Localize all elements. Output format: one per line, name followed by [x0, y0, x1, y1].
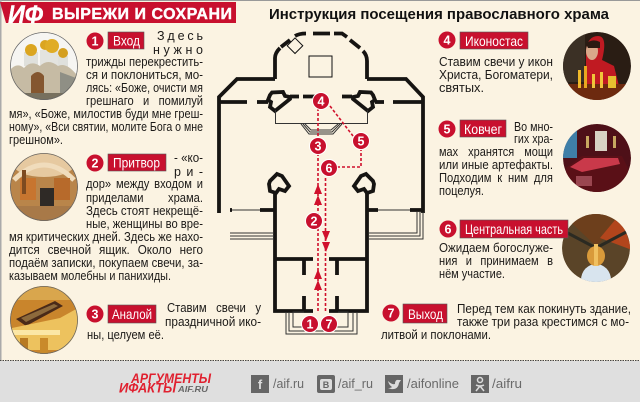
walls: [219, 34, 423, 311]
main title: Инструкция посещения православного храма: [269, 6, 610, 23]
step 4: iconostasis: Ставим свечи у икон: [439, 55, 553, 69]
arrows: [314, 184, 330, 290]
step 1: entrance: Вход: [113, 32, 140, 48]
markers: 1: [307, 318, 314, 332]
markers: 7: [326, 318, 333, 332]
step 1: entrance: нужно: [153, 43, 203, 57]
footer band: [0, 360, 640, 402]
step 3: analogion: ны, целуем её.: [87, 328, 164, 342]
step 1: entrance: ся и поклониться, мо-: [86, 68, 203, 82]
step 6: central part: ния и принимаем в: [439, 254, 553, 268]
social links: В: [323, 380, 330, 390]
step 5: ark: Во мно-: [514, 120, 553, 134]
step 5: ark: Подходим к ним для: [439, 171, 553, 185]
step 4: iconostasis: Иконостас: [465, 33, 523, 49]
banner title: ВЫРЕЖИ И СОХРАНИ: [52, 6, 232, 23]
photo: reliquary: [563, 124, 631, 192]
step 4: iconostasis: святых.: [439, 81, 484, 95]
step 6: central part: Центральная часть: [465, 221, 563, 237]
step 3: analogion: праздничной ико-: [165, 315, 261, 329]
markers: 2: [311, 214, 318, 228]
step 2: narthex: ри-: [174, 165, 203, 179]
step 6: central part: нём участие.: [439, 267, 505, 281]
step 7: exit: Выход: [408, 306, 443, 322]
step 4: iconostasis: Христа, Богоматери,: [439, 68, 553, 82]
step 1: entrance: 1: [92, 34, 99, 48]
step 5: ark: 5: [444, 122, 451, 136]
step 2: narthex: казываем молебны и панихиды.: [9, 269, 171, 283]
social links: /aif_ru: [338, 376, 373, 391]
logo: ИФ: ИФ: [8, 1, 43, 29]
header banner: [0, 1, 236, 29]
step 5: ark: или иные артефакты.: [439, 158, 553, 172]
step 3: analogion: Ставим свечи у: [167, 301, 262, 315]
footer logo: ИФАКТЫ: [119, 380, 176, 396]
step 2: narthex: Здесь стоят некрещё-: [86, 204, 203, 218]
step 5: ark: Ковчег: [464, 121, 502, 137]
step 2: narthex: подаём записки, покупаем свечи, за-: [9, 256, 203, 270]
step 2: narthex: дится свечной ящик. Около него: [9, 243, 203, 257]
step 5: ark: гих хра-: [514, 132, 553, 146]
step 6: central part: 6: [445, 222, 452, 236]
step 3: analogion: Аналой: [112, 306, 152, 322]
step 1: entrance: ному», «Вси святии, молите Бога о мне: [9, 120, 203, 134]
step 6: central part: Ожидаем богослуже-: [439, 241, 553, 255]
photo: analogion: [10, 286, 78, 354]
markers: 4: [318, 94, 325, 108]
step 1: entrance: грешнаго и помилуй: [86, 94, 203, 108]
step 1: entrance: Здесь: [157, 29, 203, 43]
step 7: exit: Перед тем как покинуть здание,: [457, 302, 631, 316]
step 2: narthex: ные, женщины во вре-: [86, 217, 203, 231]
step 1: entrance: трижды перекрестить-: [86, 55, 203, 69]
photo: woman with candles: [563, 32, 631, 100]
step 2: narthex: 2: [92, 156, 99, 170]
route: [318, 105, 361, 311]
step 2: narthex: мя критических дней. Здесь же нахо-: [9, 230, 203, 244]
step 6: central part: [439, 220, 568, 281]
step 4: iconostasis: 4: [444, 34, 451, 48]
floor plan: [219, 34, 423, 334]
footer logo: АРГУМЕНТЫ: [130, 371, 211, 386]
step 7: exit: 7: [388, 306, 395, 320]
step 4: iconostasis: [438, 32, 553, 95]
social links: /aif.ru: [273, 376, 304, 391]
markers: [302, 92, 370, 332]
social links: /aifonline: [407, 376, 459, 391]
step 7: exit: [381, 302, 631, 342]
step 7: exit: также три раза крестимся с мо-: [457, 315, 629, 329]
photo: ceiling: [562, 214, 630, 282]
markers: 5: [358, 134, 365, 148]
step 3: analogion: [86, 301, 262, 342]
footer logo: AIF.RU: [177, 385, 208, 394]
social links: [251, 375, 522, 393]
step 2: narthex: приделами храма.: [86, 191, 203, 205]
step 5: ark: мах хранятся мощи: [439, 145, 553, 159]
social links: f: [258, 377, 263, 392]
step 2: narthex: Притвор: [113, 154, 160, 170]
markers: 3: [315, 140, 322, 154]
social links: /aifru: [492, 376, 522, 391]
step 2: narthex: [9, 151, 203, 283]
step 1: entrance: лясь: «Боже, очисти мя: [86, 81, 203, 95]
step 2: narthex: дор» между входом и: [86, 177, 203, 191]
step 1: entrance: [9, 29, 203, 147]
markers: 6: [326, 162, 333, 176]
step 1: entrance: мя», «Боже, милостив буди мне греш-: [9, 107, 203, 121]
footer logo: [119, 371, 211, 396]
step 2: narthex: - «ко-: [174, 151, 203, 165]
step 3: analogion: 3: [92, 308, 99, 322]
step 5: ark: [438, 120, 553, 198]
step 5: ark: поцелуя.: [439, 184, 484, 198]
step 1: entrance: грешном».: [9, 133, 63, 147]
photo: cathedral: [10, 32, 78, 102]
thin lines: [230, 38, 423, 334]
photo: narthex interior: [10, 153, 78, 222]
step 7: exit: литвой и поклонами.: [381, 328, 491, 342]
